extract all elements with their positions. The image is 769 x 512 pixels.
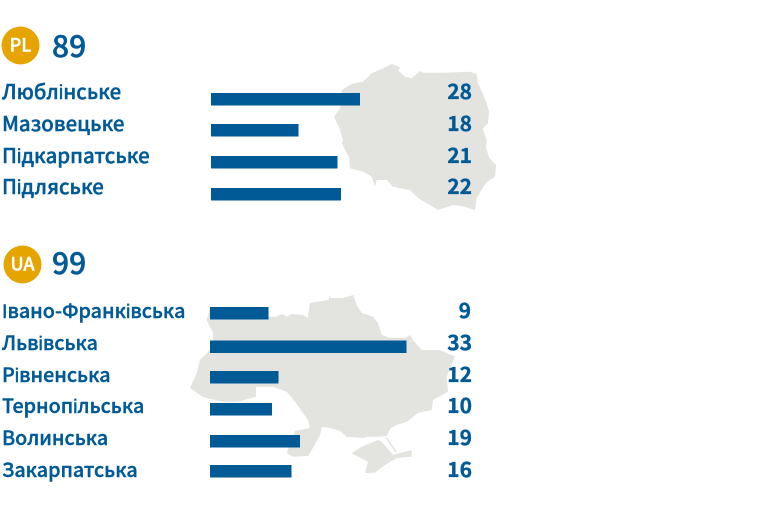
row: Львівська 33: 33 <box>447 327 472 357</box>
row: Закарпатська 16: Закарпатська <box>2 454 138 483</box>
row: Підкарпатське 21 <box>2 139 472 170</box>
row: Закарпатська 16 <box>2 454 472 484</box>
total: 89: 89 <box>52 22 86 66</box>
badge: PL <box>2 26 40 64</box>
badge: UA: UA <box>10 250 35 276</box>
map: Poland <box>334 64 496 210</box>
row: Тернопільська 10: 10 <box>447 390 472 420</box>
row: Підляське 22: Підляське <box>2 170 104 200</box>
row: Івано-Франківська 9: 9 <box>459 295 471 325</box>
map: Ukraine <box>190 295 455 473</box>
row: Підляське 22: 22 <box>447 171 472 201</box>
row: Люблінське 28: Люблінське <box>1 75 121 105</box>
row: Мазовецьке 18 <box>2 107 472 138</box>
total: 99: 99 <box>52 239 86 283</box>
row: Волинська 19 <box>2 422 472 452</box>
badge: UA <box>4 246 42 284</box>
row: Мазовецьке 18: 18 <box>447 108 472 138</box>
row: Волинська 19: 19 <box>447 422 472 452</box>
row: Рівненська 12: Рівненська <box>2 359 111 388</box>
row: Тернопільська 10: Тернопільська <box>2 390 144 419</box>
row: Підкарпатське 21: Підкарпатське <box>2 139 150 169</box>
row: Підкарпатське 21: 21 <box>447 140 472 170</box>
row: Івано-Франківська 9: Івано-Франківська <box>2 295 185 324</box>
row: Люблінське 28 <box>1 75 472 106</box>
row: Підляське 22 <box>2 170 472 201</box>
row: Рівненська 12: 12 <box>447 359 472 389</box>
row: Рівненська 12 <box>2 359 472 389</box>
row: Люблінське 28: 28 <box>447 76 472 106</box>
row: Закарпатська 16: 16 <box>447 454 472 484</box>
row: Мазовецьке 18: Мазовецьке <box>2 107 124 137</box>
badge: PL: PL <box>10 32 31 58</box>
row: Івано-Франківська 9 <box>2 295 471 325</box>
row: Львівська 33: Львівська <box>1 327 98 356</box>
panel: Ukraine <box>1 239 472 484</box>
row: Тернопільська 10 <box>2 390 472 420</box>
row: Волинська 19: Волинська <box>2 422 108 451</box>
row: Львівська 33 <box>1 327 472 357</box>
panel: Poland <box>1 22 496 210</box>
